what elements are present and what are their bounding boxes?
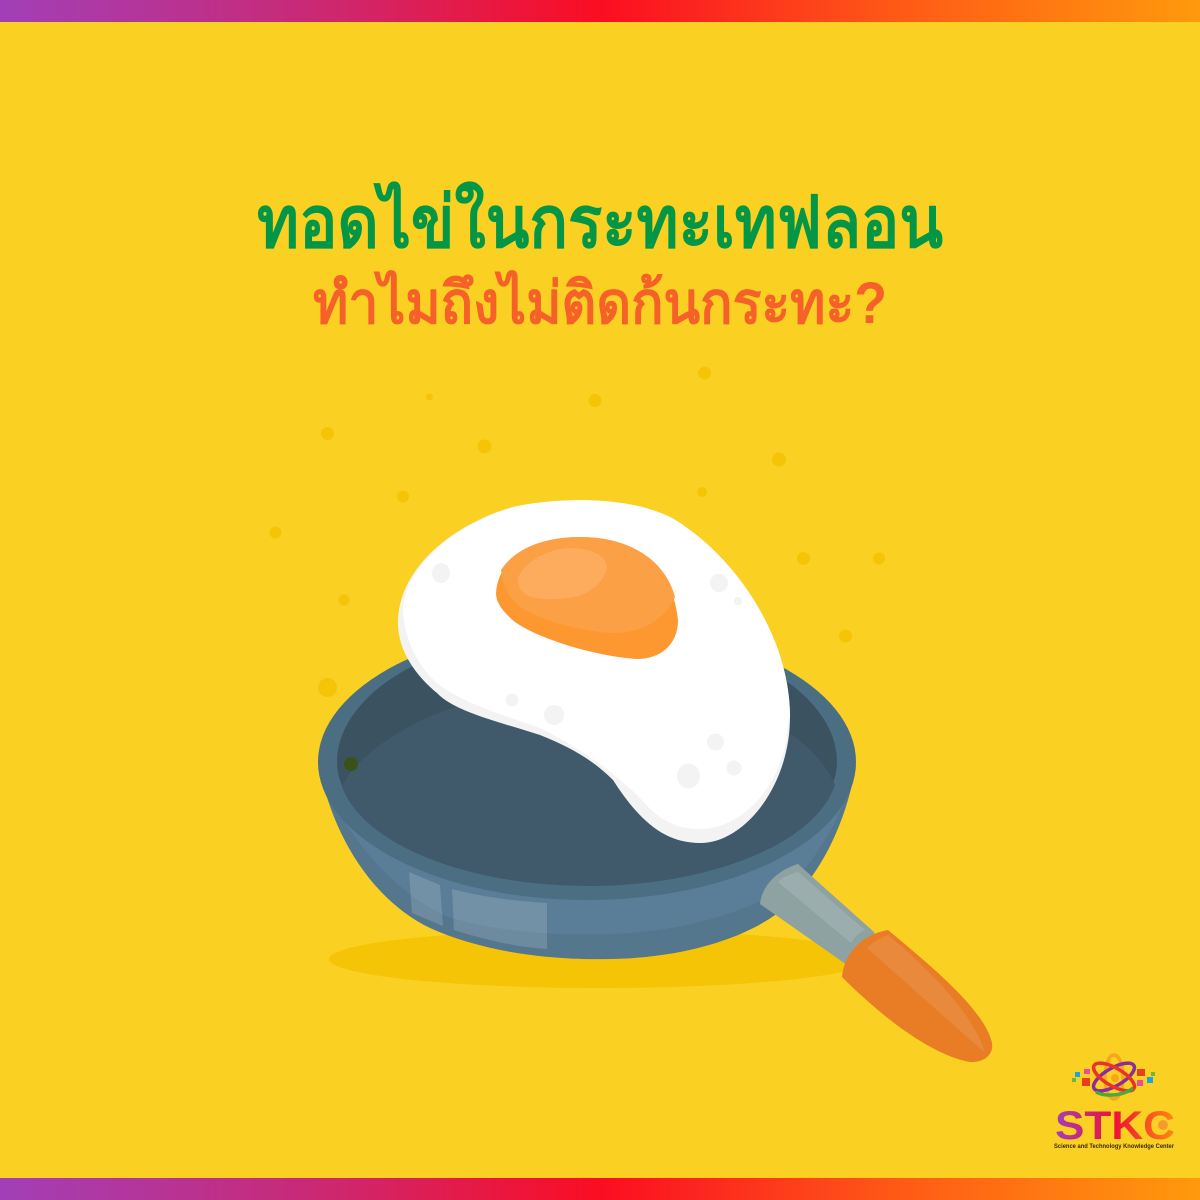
egg white xyxy=(403,500,790,829)
yolk xyxy=(496,537,678,659)
metal handle highlight xyxy=(778,872,865,943)
logo atom icon xyxy=(1090,1055,1138,1099)
top gradient bar xyxy=(0,0,1200,22)
logo side squares xyxy=(1072,1069,1155,1086)
yolk highlight xyxy=(518,548,607,599)
decorative oil splatter dots xyxy=(270,366,885,697)
logo wordmark: STKC xyxy=(1055,1104,1175,1148)
pan handle xyxy=(760,864,992,1062)
oil spot xyxy=(344,757,358,771)
orange grip xyxy=(842,930,992,1062)
orange grip highlight xyxy=(867,935,985,1053)
STKC logo xyxy=(1054,1055,1175,1150)
subtitle: ทำไมถึงไม่ติดก้นกระทะ? xyxy=(313,270,887,336)
pan shadow xyxy=(329,930,871,988)
pan interior xyxy=(337,628,837,882)
title: ทอดไข่ในกระทะเทฟลอน xyxy=(257,180,943,263)
pan cooking surface xyxy=(342,692,835,886)
yolk light area xyxy=(501,537,675,633)
bottom gradient bar xyxy=(0,1178,1200,1200)
frying pan xyxy=(318,624,856,959)
pan body xyxy=(319,765,856,959)
egg white shadow edge xyxy=(398,500,790,843)
fried egg xyxy=(398,500,790,843)
metal handle xyxy=(760,864,882,965)
pan reflections xyxy=(409,872,547,949)
pan side highlight band xyxy=(325,765,850,934)
pan rim xyxy=(318,624,856,900)
logo caption: Science and Technology Knowledge Center xyxy=(1054,1144,1175,1150)
logo dot xyxy=(1158,1120,1168,1130)
egg white bubbles xyxy=(432,563,742,788)
